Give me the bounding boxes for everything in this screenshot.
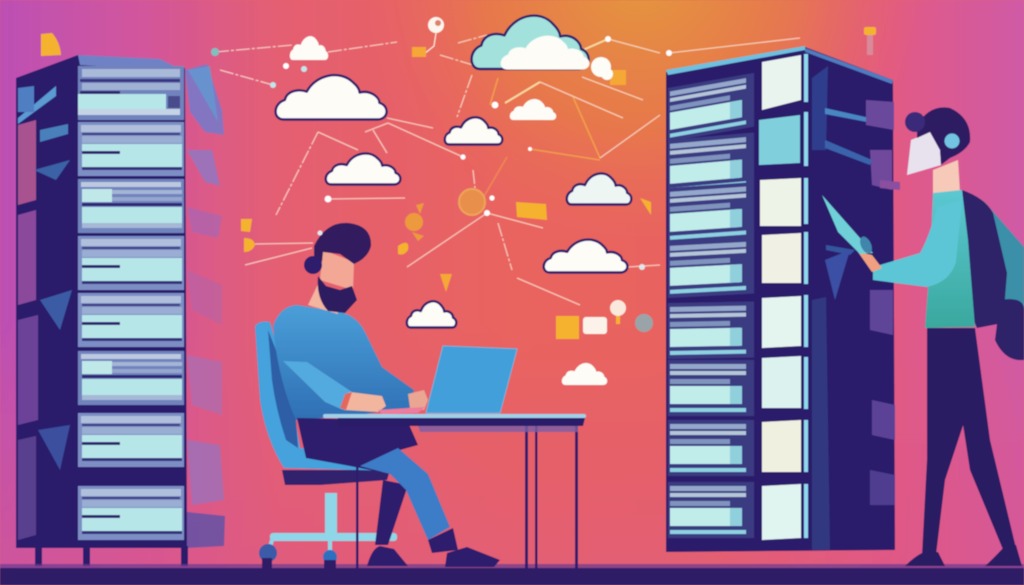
icon: orange ring node — [459, 189, 495, 215]
sweater — [273, 305, 414, 420]
person: seated man with laptop — [255, 223, 500, 568]
icon: grey circle — [635, 314, 653, 332]
sweater — [925, 190, 975, 328]
rack body — [16, 55, 187, 548]
beard — [318, 276, 357, 313]
cloud: mid left — [326, 153, 400, 184]
laptop — [426, 346, 517, 413]
small icons and nodes — [41, 17, 876, 339]
rack body — [666, 47, 895, 552]
icon: white blob and orange box — [591, 57, 626, 85]
cloud: large teal top — [472, 16, 589, 69]
tablet — [822, 195, 873, 254]
drawer rows — [78, 66, 184, 540]
chair — [255, 322, 397, 568]
icon: orange figure — [405, 203, 424, 241]
cloud: white overlay on teal — [501, 36, 590, 70]
near shoe — [445, 547, 500, 567]
left drawers — [668, 73, 754, 538]
top edge — [666, 46, 805, 75]
clouds — [276, 16, 631, 385]
icon: yellow folder — [516, 202, 547, 220]
person: standing figure with tablet — [822, 107, 1024, 566]
backpack blob — [995, 299, 1024, 360]
rack side patches — [812, 66, 900, 550]
icon: orange box — [412, 47, 426, 57]
earphone — [944, 134, 960, 148]
desk underside — [338, 418, 585, 426]
neck — [933, 160, 960, 195]
floor — [0, 564, 1024, 585]
cloud: right — [544, 240, 627, 272]
cloud: large left — [276, 75, 387, 120]
arm — [873, 200, 962, 287]
network connection lines — [215, 35, 800, 305]
backpack dark — [962, 190, 1007, 328]
far shoe — [367, 546, 408, 566]
near leg — [360, 448, 450, 540]
sock — [428, 528, 458, 553]
right panels — [759, 55, 801, 540]
blue vertical bars — [804, 54, 808, 538]
icon: yellow square — [556, 316, 579, 339]
far leg — [375, 480, 408, 545]
hands — [340, 390, 428, 414]
desk legs — [356, 424, 578, 568]
server rack: right — [666, 46, 900, 552]
rack right side shreds — [185, 64, 225, 548]
icon: orange fragment — [640, 198, 651, 215]
cloud: lowest — [562, 363, 607, 385]
icon: yellow flag — [41, 33, 61, 56]
rack top — [78, 55, 184, 71]
desk and laptop — [323, 346, 586, 568]
cloud: centre small — [445, 117, 502, 144]
legs — [905, 328, 1022, 566]
hand — [858, 252, 882, 272]
hair bun — [905, 112, 925, 132]
server rack: left — [16, 55, 225, 566]
icon: yellow heart — [398, 243, 408, 254]
face — [320, 250, 354, 290]
rack feet — [35, 546, 188, 566]
cloud: top small — [290, 36, 328, 60]
cloud: bottom small — [407, 301, 456, 328]
face — [907, 132, 941, 175]
icon: orange triangle — [440, 274, 452, 292]
desk top — [323, 414, 586, 418]
icon: white rounded square — [583, 317, 607, 334]
headphone dot — [318, 230, 322, 236]
nodes — [211, 36, 672, 270]
backpack teal layer — [983, 200, 1024, 330]
headphone ear — [304, 256, 322, 274]
icon: yellow drop — [244, 238, 255, 252]
rack left face patches — [18, 86, 72, 540]
cloud: right of centre — [567, 173, 631, 204]
cloud: centre no outline — [510, 99, 556, 120]
icon: white pin — [424, 17, 444, 54]
icon: small teal pin — [864, 27, 876, 55]
icon: yellow tab — [241, 219, 252, 232]
icon: white node — [610, 300, 626, 324]
hair — [917, 107, 970, 165]
near arm — [283, 361, 352, 410]
neck — [308, 280, 338, 314]
hair — [314, 223, 371, 264]
thigh — [297, 418, 420, 480]
